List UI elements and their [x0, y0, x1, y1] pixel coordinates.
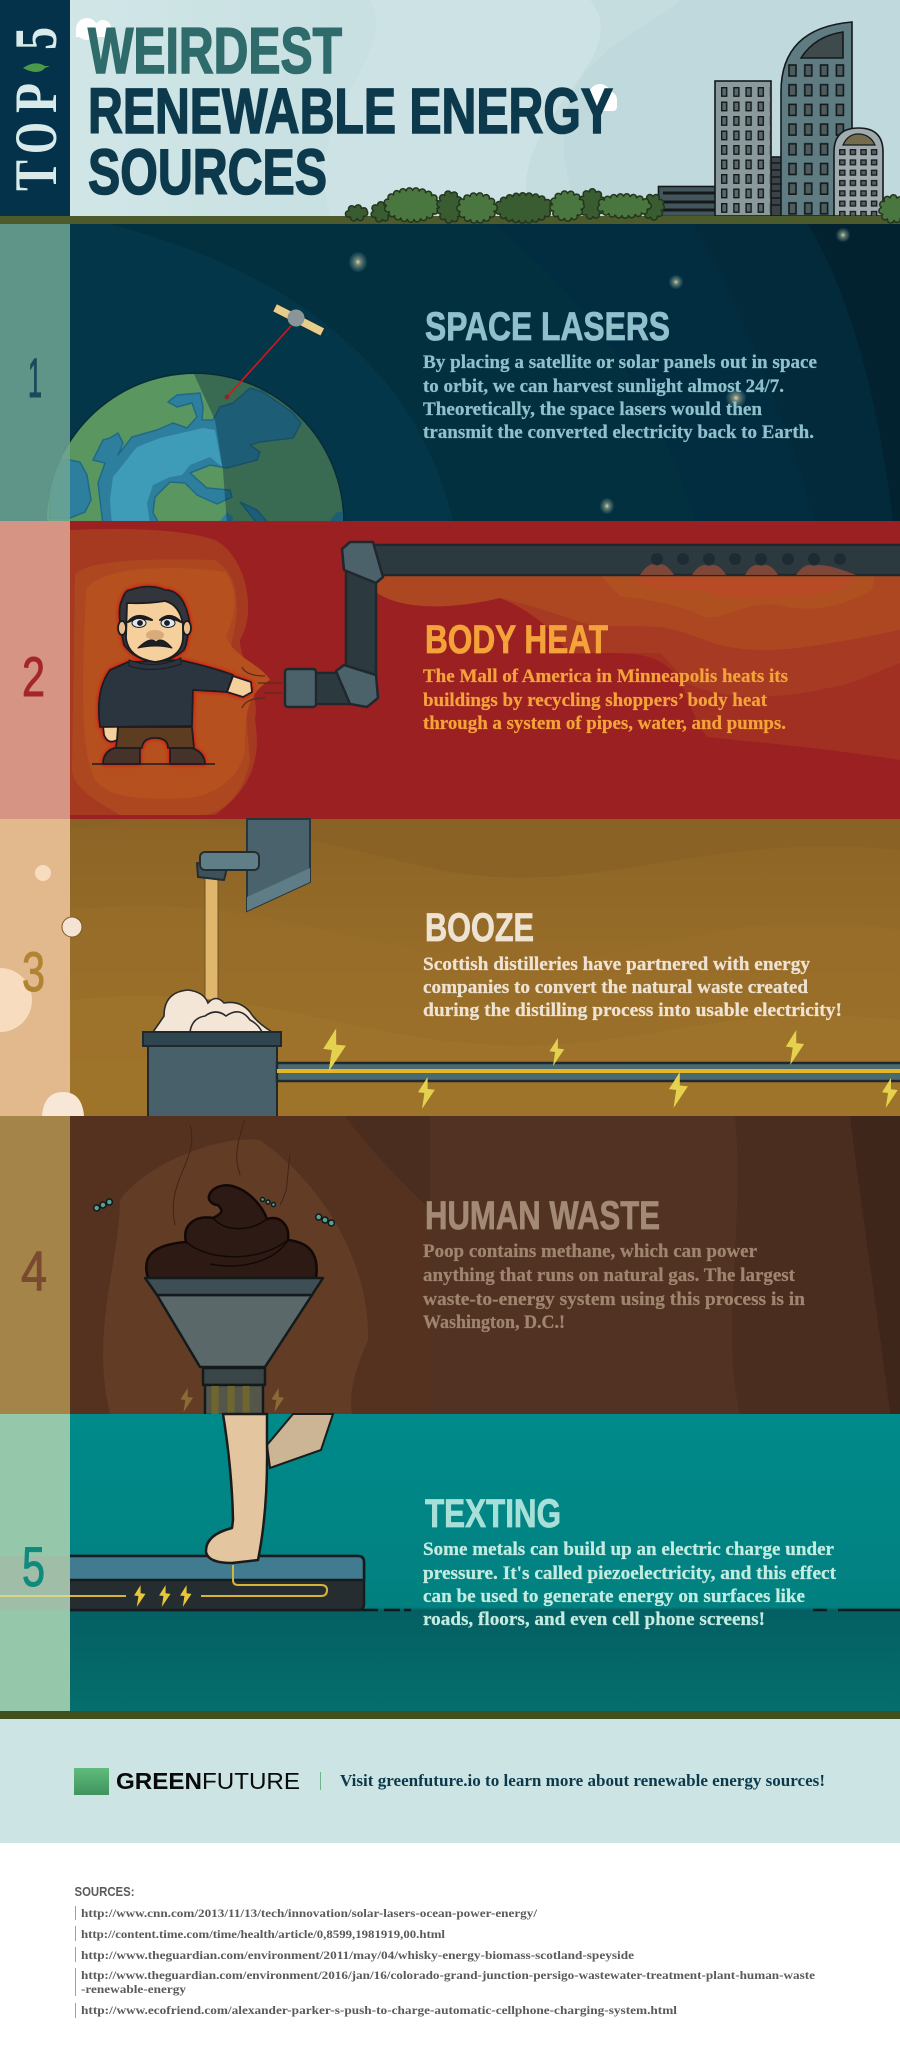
panel: body heat	[70, 521, 900, 819]
bottom ground strip	[0, 1711, 900, 1719]
text: space lasers	[423, 352, 817, 443]
text: body heat: through a system of pipes, water, and pumps.	[423, 713, 786, 734]
number strip 4: 4	[21, 1239, 47, 1302]
header panel	[0, 0, 900, 224]
heading: body heat: BODY HEAT	[425, 618, 608, 662]
text: texting	[423, 1539, 837, 1630]
white sources background	[0, 1843, 900, 2059]
text: space lasers: By placing a satellite or solar panels out in space	[423, 352, 817, 373]
phone	[0, 1556, 364, 1610]
panel: texting	[0, 1414, 900, 1711]
flies	[93, 1197, 335, 1227]
text: human waste	[423, 1241, 805, 1333]
Top 5 sidebar: P	[3, 83, 69, 113]
text: texting: Some metals can build up an electric charge under	[423, 1539, 835, 1560]
title: WEIRDEST	[88, 14, 342, 87]
text: booze: during the distilling process into usable electricity!	[423, 1000, 842, 1021]
forearm behind	[267, 1414, 333, 1468]
heat motion lines	[242, 667, 282, 708]
lightning bolts	[323, 1028, 898, 1109]
number strip 1	[0, 224, 70, 521]
sources list: http://www.theguardian.com/environment/2011/may/04/whisky-energy-biomass-scotland-speyside	[81, 1948, 635, 1962]
power cable	[277, 1063, 900, 1081]
text: human waste: Poop contains methane, which can power	[423, 1241, 758, 1262]
heater vents	[640, 553, 856, 575]
ground line	[70, 1609, 900, 1611]
text: space lasers: to orbit, we can harvest sunlight almost 24/7.	[423, 376, 784, 397]
number strip 3: 3	[22, 940, 45, 1003]
number strip 2: 2	[22, 645, 45, 708]
sources list	[74, 1884, 816, 2018]
text: human waste: Washington, D.C.!	[423, 1312, 565, 1333]
heading: texting: TEXTING	[425, 1492, 561, 1536]
text: human waste: waste-to-energy system using this process is in	[423, 1289, 805, 1310]
arm and finger	[206, 1414, 267, 1563]
logo wordmark: FUTURE	[202, 1768, 300, 1794]
text: texting: pressure. It's called piezoelectricity, and this effect	[423, 1563, 837, 1584]
text: space lasers: Theoretically, the space lasers would then	[423, 399, 762, 420]
bushes	[348, 191, 900, 220]
number strip 4	[0, 1116, 70, 1414]
heat pipe	[285, 542, 900, 707]
ground strip	[0, 216, 900, 224]
earth	[47, 372, 344, 521]
Top 5 sidebar: 5	[3, 27, 69, 50]
heading: human waste: HUMAN WASTE	[425, 1194, 660, 1238]
panel: human waste	[70, 1116, 900, 1415]
title: SOURCES	[88, 136, 327, 208]
footer panel	[0, 1719, 900, 1843]
title: RENEWABLE ENERGY	[88, 75, 613, 147]
logo wordmark: GREEN	[116, 1768, 202, 1794]
heading: booze: BOOZE	[425, 906, 534, 950]
heat blob around man	[70, 529, 270, 815]
text: human waste: anything that runs on natural gas. The largest	[423, 1265, 796, 1286]
funnel	[145, 1278, 323, 1415]
sources list: http://www.theguardian.com/environment/2016/jan/16/colorado-grand-junction-persigo-wastewater-treatment-plant-human-waste	[81, 1968, 816, 1982]
dim lightning bolts	[180, 1388, 284, 1412]
foam	[153, 990, 272, 1032]
heat waves from pipe	[374, 570, 900, 760]
piezo wire	[0, 1565, 327, 1596]
smell lines	[173, 1120, 290, 1225]
Top 5 sidebar: O	[3, 122, 69, 154]
character: man	[92, 586, 252, 764]
text: booze	[423, 954, 842, 1021]
heading: space lasers: SPACE LASERS	[425, 305, 670, 349]
panel: space lasers	[0, 224, 900, 521]
number strip 5	[0, 1414, 70, 1711]
text: texting: can be used to generate energy on surfaces like	[423, 1586, 805, 1607]
number strip 1: 1	[28, 346, 42, 409]
text: body heat	[423, 666, 788, 734]
satellite and laser	[224, 304, 325, 400]
cloud behind title	[76, 18, 617, 111]
bubbles	[0, 865, 84, 1116]
text: space lasers: transmit the converted electricity back to Earth.	[423, 422, 814, 443]
call to action: Visit greenfuture.io to learn more about renewable energy sources!	[340, 1771, 825, 1790]
number strip 2	[0, 521, 70, 819]
number strip 5: 5	[22, 1535, 45, 1598]
text: body heat: The Mall of America in Minneapolis heats its	[423, 666, 788, 687]
Top 5 sidebar: T	[3, 160, 69, 191]
sources list: http://content.time.com/time/health/article/0,8599,1981919,00.html	[81, 1927, 446, 1941]
city buildings	[658, 22, 883, 216]
wire lightning bolts	[134, 1585, 191, 1607]
Top 5 sidebar	[0, 0, 70, 216]
text: texting: roads, floors, and even cell phone screens!	[423, 1609, 765, 1630]
chute	[247, 819, 310, 911]
sources list: SOURCES:	[74, 1884, 134, 1899]
title	[88, 14, 613, 208]
sources list: http://www.ecofriend.com/alexander-parker-s-push-to-charge-automatic-cellphone-charging-system.html	[81, 2003, 678, 2017]
poop	[146, 1185, 317, 1278]
panel: booze	[70, 819, 900, 1118]
number strip 3	[0, 819, 84, 1116]
text: body heat: buildings by recycling shoppers’ body heat	[423, 690, 768, 711]
text: booze: Scottish distilleries have partnered with energy	[423, 954, 811, 975]
logo wordmark	[116, 1768, 300, 1794]
tank	[143, 1032, 281, 1118]
text: booze: companies to convert the natural waste created	[423, 977, 808, 998]
logo mark	[74, 1768, 109, 1795]
stream of liquid	[205, 875, 218, 1000]
sources list: http://www.cnn.com/2013/11/13/tech/innovation/solar-lasers-ocean-power-energy/	[81, 1906, 538, 1920]
stars	[349, 228, 850, 514]
tap	[197, 852, 259, 880]
sources list: -renewable-energy	[81, 1982, 186, 1996]
